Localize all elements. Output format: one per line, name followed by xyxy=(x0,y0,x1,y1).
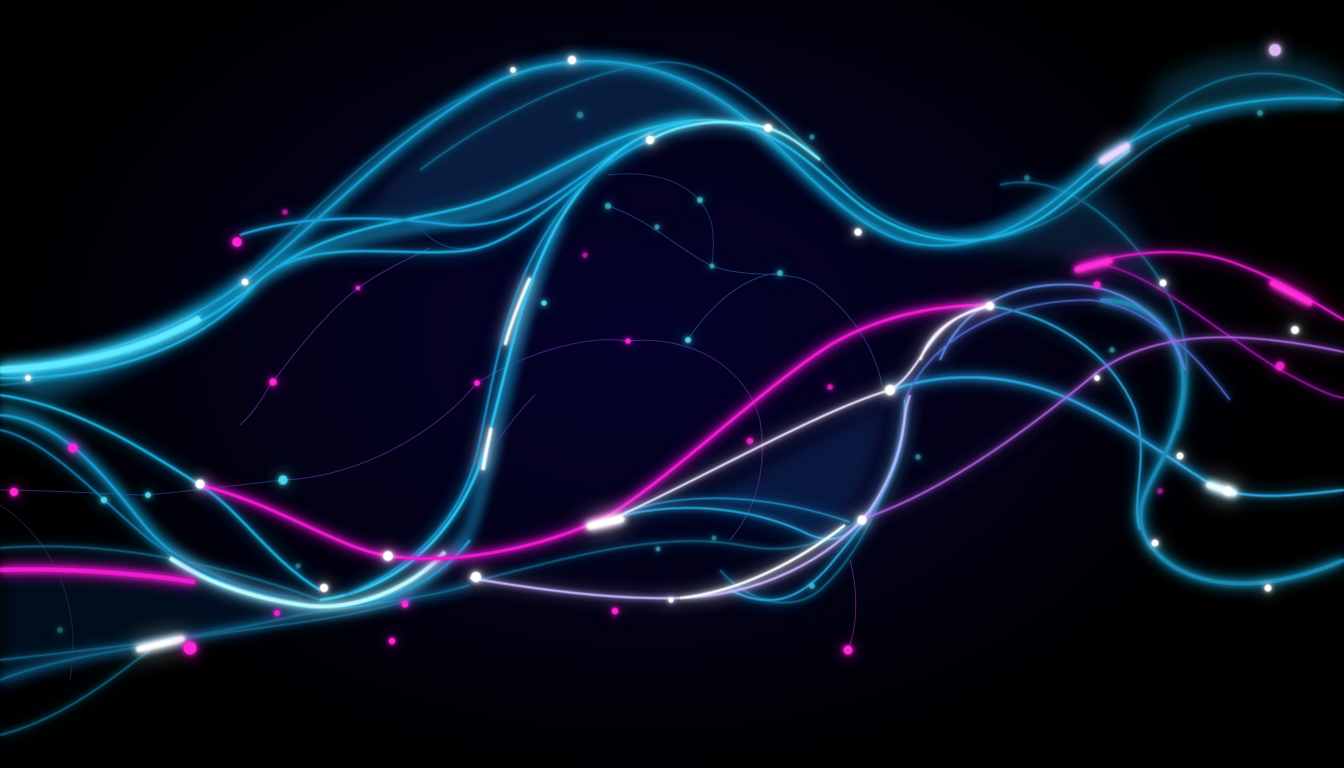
right cyan and violet loops xyxy=(625,284,1344,600)
magenta main strand xyxy=(0,252,1344,582)
lavender node, top right xyxy=(1269,44,1281,56)
teal nodes xyxy=(57,110,1263,633)
bright crest strand xyxy=(650,122,820,160)
upper cyan ribbon xyxy=(0,61,1344,378)
lower left cyan ribbons xyxy=(0,395,470,607)
central S-shaped strand xyxy=(320,122,690,600)
bright white nodes xyxy=(25,56,1299,603)
thin connector arcs with purple and teal tones xyxy=(0,174,882,680)
white and violet thin strands xyxy=(470,305,1344,598)
magenta nodes xyxy=(10,209,1285,655)
bright cyan core at far left xyxy=(0,318,200,370)
bright dash highlights xyxy=(139,146,1310,649)
